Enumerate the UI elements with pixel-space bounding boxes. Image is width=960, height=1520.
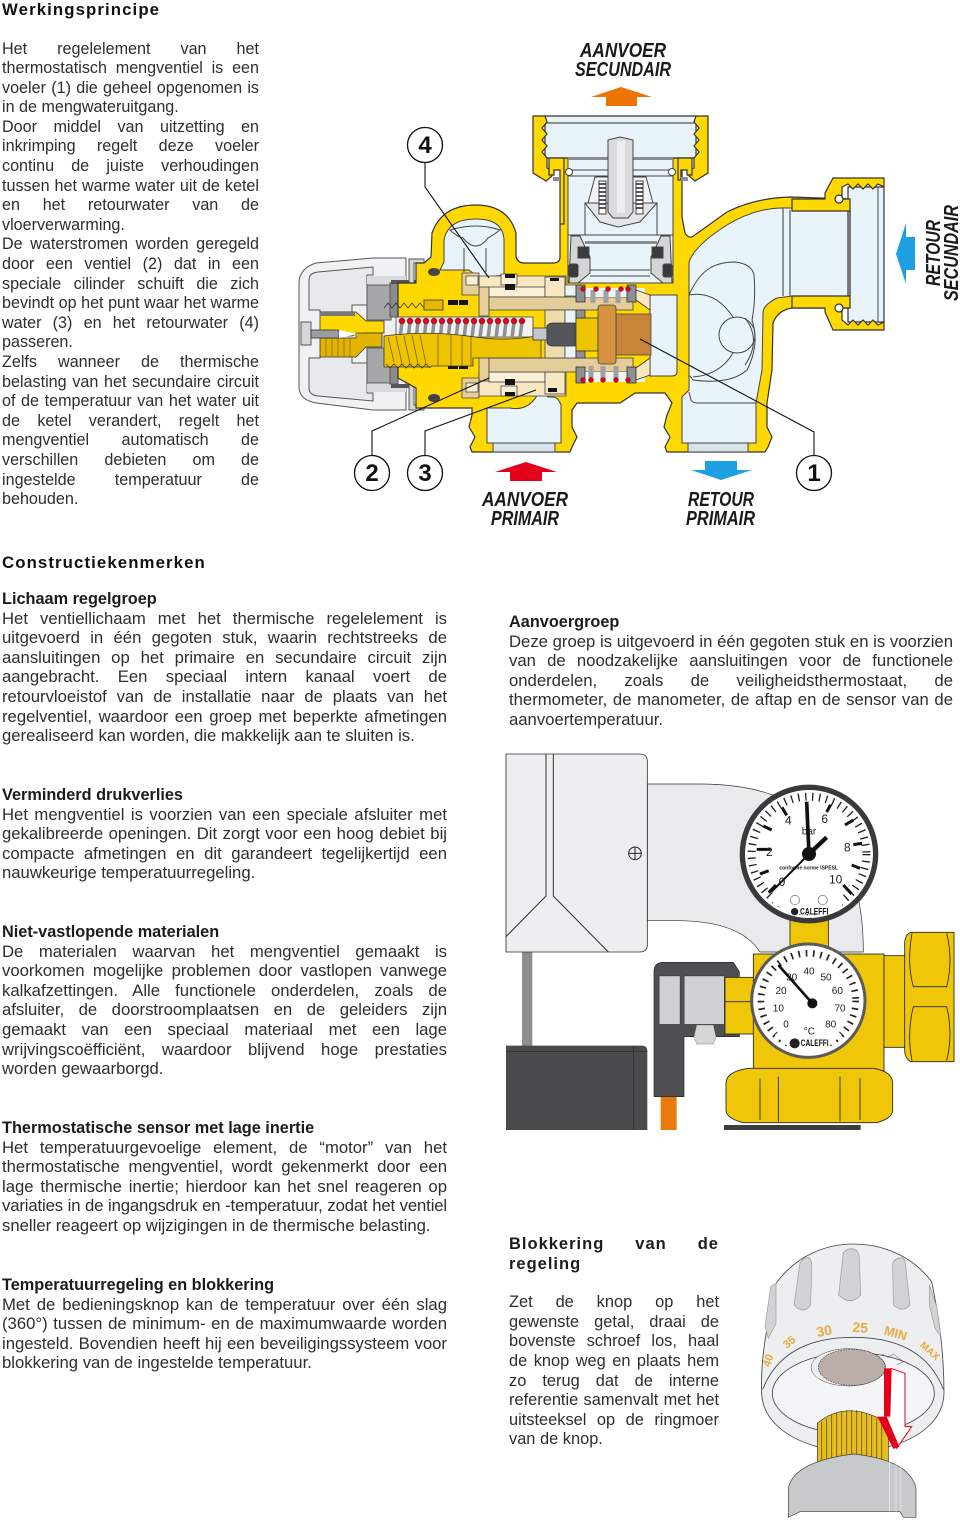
- text block: Lichaam regelgroep: aansluitingen op het primaire en secundaire circuit zijn: [2, 648, 447, 667]
- text block: working principle: passeren.: [2, 333, 73, 351]
- text block: Lichaam regelgroep: [2, 590, 447, 745]
- text block: Blokkering van de regeling: uitsteeksel op de ringmoer: [509, 1411, 719, 1429]
- seals: [428, 268, 559, 402]
- text block: working principle: continu de juiste verhoudingen: [2, 157, 259, 175]
- knob rim and opening: [763, 1337, 943, 1434]
- red arrow: [877, 1368, 912, 1449]
- copper sensor: [598, 305, 651, 364]
- temperature scale: 40: [761, 1353, 776, 1369]
- text block: Lichaam regelgroep: regelventiel, waardoor een groep met beperkte afmetingen: [2, 707, 447, 726]
- text block: Verminderd drukverlies: compacte afmetingen en dit garandeert tegelijkertijd een: [2, 844, 447, 863]
- water cavities: [440, 158, 850, 452]
- text block: Niet-vastlopende materialen: voorkomen mogelijke problemen door vastlopen vanwege: [2, 961, 447, 980]
- label: aanvoer primair: PRIMAIR: [491, 508, 559, 530]
- text block: Blokkering van de regeling: van de knop.: [509, 1430, 603, 1448]
- pressure gauge: bar: [802, 827, 817, 838]
- text block: Blokkering van de regeling: regeling: [509, 1255, 581, 1273]
- label: aanvoer secundair: AANVOER: [579, 40, 666, 62]
- text block: Temperatuurregeling en blokkering: Temperatuurregeling en blokkering: [2, 1276, 274, 1294]
- thermometer: 10: [773, 1003, 784, 1014]
- heading: Werkingsprincipe: Werkingsprincipe: [2, 0, 160, 19]
- text block: Lichaam regelgroep: Het ventiellichaam met het thermische regelelement is: [2, 609, 447, 628]
- thermometer: 40: [803, 966, 815, 977]
- text block: Lichaam regelgroep: Lichaam regelgroep: [2, 590, 157, 608]
- central spring: [396, 317, 533, 340]
- text block: Aanvoergroep: [509, 613, 953, 729]
- text block: Lichaam regelgroep: uitgevoerd in één gegoten stuk, waarin rechtstreeks de: [2, 628, 447, 647]
- text block: Temperatuurregeling en blokkering: blokkering van de ingestelde temperatuur.: [2, 1353, 312, 1372]
- text block: working principle: in de mengwateruitgang.: [2, 98, 179, 116]
- illustration: gauge assembly: [506, 754, 954, 1130]
- arrow: orange up: [591, 87, 652, 106]
- thermometer: 30: [786, 973, 798, 984]
- arrow: blue left: [896, 223, 915, 284]
- text block: Niet-vastlopende materialen: afsluiter, de doorstroomplaatsen en de geleiders zijn: [2, 1000, 447, 1019]
- illustration: temperature knob: [761, 1244, 944, 1518]
- text block: Aanvoergroep: thermometer, de manometer, de aftap en de sensor van de: [509, 690, 953, 709]
- thermometer: 20: [775, 986, 787, 997]
- arrow: red up: [495, 462, 557, 481]
- text block: working principle: behouden.: [2, 490, 78, 508]
- text block: Verminderd drukverlies: Verminderd drukverlies: [2, 786, 183, 804]
- text block: working principle: bevindt op het punt waar het warme: [2, 294, 259, 312]
- text block: Verminderd drukverlies: nauwkeurige temperatuurregeling.: [2, 863, 255, 882]
- text block: Aanvoergroep: onderdelen, zoals de veiligheidsthermostaat, de: [509, 671, 953, 690]
- text block: working principle: of de temperatuur van het water uit: [2, 392, 259, 410]
- text block: working principle: speciale cilinder schuift die zich: [2, 275, 259, 293]
- text block: working principle: door een ventiel (2) dat in een: [2, 255, 259, 273]
- thermometer: 70: [834, 1003, 846, 1014]
- text block: Thermostatische sensor: thermostatische mengventiel, wordt gekenmerkt door een: [2, 1157, 447, 1176]
- temperature scale: 25: [852, 1319, 869, 1336]
- text block: Temperatuurregeling en blokkering: Met de bedieningsknop kan de temperatuur over één slag: [2, 1295, 447, 1314]
- text block: Temperatuurregeling en blokkering: ingesteld. Bovendien heeft hij een beveiligingssysteem voor: [2, 1334, 447, 1353]
- heading: Constructiekenmerken: Constructiekenmerken: [2, 553, 206, 572]
- grey valve body: [788, 1454, 916, 1517]
- pressure gauge: 10: [829, 872, 843, 886]
- callout 4: 4: [418, 132, 432, 159]
- text block: Thermostatische sensor: [2, 1119, 447, 1235]
- sensor connector: [654, 962, 739, 1130]
- text block: Niet-vastlopende materialen: [2, 923, 447, 1078]
- text block: working principle: Het regelelement van het: [2, 40, 259, 58]
- temperature scale: 30: [815, 1321, 833, 1340]
- text block: Blokkering van de regeling: [509, 1235, 719, 1448]
- valve knob: [299, 258, 424, 410]
- text block: working principle: en het retourwater van de: [2, 196, 259, 214]
- text block: Lichaam regelgroep: gerealiseerd kan worden, die makkelijk aan te sluiten is.: [2, 726, 415, 745]
- text block: working principle: de ketel verandert, regelt het: [2, 412, 259, 430]
- text block: Temperatuurregeling en blokkering: [2, 1276, 447, 1372]
- callout 4: [408, 128, 442, 162]
- text block: Thermostatische sensor: Het temperatuurgevoelige element, de “motor” van het: [2, 1138, 447, 1157]
- text block: Thermostatische sensor: variaties in de ingangsdruk en -temperatuur, zodat het ventiel: [2, 1196, 447, 1215]
- text block: working principle: verschillen debieten om de: [2, 451, 259, 469]
- text block: Niet-vastlopende materialen: De materialen waarvan het mengventiel gemaakt is: [2, 942, 447, 961]
- text block: Blokkering van de regeling: zo terug dat de interne: [509, 1372, 719, 1390]
- thermometer: [752, 944, 865, 1057]
- text block: Temperatuurregeling en blokkering: (360°) tussen de minimum- en de maximumwaarde worden: [2, 1314, 447, 1333]
- text block: working principle: inkrimping regelt deze voeler: [2, 137, 259, 155]
- text block: working principle: voeler (1) die geheel opgenomen is: [2, 79, 259, 97]
- text block: Blokkering van de regeling: Blokkering van de: [509, 1235, 719, 1253]
- pressure gauge: 2: [766, 845, 773, 859]
- adjusting spindle and thread: [301, 300, 598, 368]
- knob shell: [761, 1244, 944, 1447]
- insulation shell: [506, 754, 647, 952]
- label: retour primair: [686, 489, 755, 530]
- top threaded nut: [533, 116, 708, 224]
- text block: Verminderd drukverlies: gekalibreerde openingen. Dit zorgt voor een hoog debiet bij: [2, 824, 447, 843]
- label: aanvoer primair: AANVOER: [481, 489, 568, 511]
- thermometer: 60: [832, 986, 843, 997]
- text block: Niet-vastlopende materialen: gemaakt van een speciaal materiaal met een lage: [2, 1020, 447, 1039]
- text block: working principle: tussen het warme water uit de ketel: [2, 177, 259, 195]
- label: retour primair: RETOUR: [688, 489, 754, 511]
- pressure gauge: CALEFFI: [800, 907, 828, 917]
- grey pipe elbow: [647, 784, 863, 952]
- text block: Lichaam regelgroep: aangebracht. Een speciaal intern kanaal voert de: [2, 667, 447, 686]
- thermometer: 0: [783, 1019, 789, 1030]
- text block: Aanvoergroep: Aanvoergroep: [509, 613, 619, 631]
- spring housings: [576, 285, 650, 383]
- callout 2: 2: [365, 460, 379, 487]
- text block: Verminderd drukverlies: [2, 786, 447, 882]
- text block: working principle: ingestelde temperatuur de: [2, 471, 259, 489]
- callout 1: [796, 456, 832, 490]
- temperature scale: MIN: [882, 1323, 909, 1344]
- text block: Niet-vastlopende materialen: worden gewaarborgd.: [2, 1059, 163, 1078]
- yellow group body: [724, 917, 954, 1130]
- elbow inner contours: [689, 262, 756, 403]
- pressure gauge: 6: [821, 812, 828, 826]
- thermometer: 80: [825, 1019, 837, 1030]
- valve body silhouette: [398, 158, 850, 452]
- text block: Blokkering van de regeling: bovenste schroef los, haal: [509, 1332, 719, 1350]
- pressure gauge: 4: [785, 814, 792, 828]
- callout 3: [408, 456, 442, 490]
- thermostatic chamber details: [566, 137, 676, 283]
- grey drop pipe: [522, 952, 532, 1046]
- text block: working principle: water (3) en het retourwater (4): [2, 314, 259, 332]
- right threaded fitting: [783, 178, 884, 330]
- text block: Aanvoergroep: aanvoertemperatuur.: [509, 710, 663, 729]
- text block: Verminderd drukverlies: Het mengventiel is voorzien van een speciale afsluiter met: [2, 805, 447, 824]
- label: aanvoer secundair: SECUNDAIR: [575, 59, 671, 81]
- text block: working principle: belasting van het secundaire circuit: [2, 373, 259, 391]
- temperature scale: 35: [781, 1334, 798, 1351]
- callout 2: [354, 456, 390, 490]
- label: retour primair: PRIMAIR: [686, 508, 755, 530]
- pressure gauge: 8: [844, 841, 851, 855]
- label: aanvoer primair: [481, 489, 568, 530]
- temperature scale: [761, 1319, 942, 1369]
- text block: working principle: De waterstromen worden geregeld: [2, 235, 259, 253]
- text block: working principle: vloerverwarming.: [2, 216, 125, 234]
- text block: working principle: Door middel van uitzetting en: [2, 118, 259, 136]
- text block: Blokkering van de regeling: gewenste getal, draai de: [509, 1313, 719, 1331]
- callout 3: 3: [418, 460, 432, 487]
- finger grooves: [765, 1249, 941, 1338]
- label: retour secundair: [923, 205, 960, 301]
- leader lines: [372, 162, 814, 457]
- thermometer: 50: [820, 973, 832, 984]
- diagram labels and numbered callouts: [354, 40, 960, 530]
- dark box: [506, 1046, 647, 1130]
- text block: Niet-vastlopende materialen: wrijvingscoëfficiënt, waardoor blijvend hoge prestaties: [2, 1040, 447, 1059]
- text block: Blokkering van de regeling: referentie samenvalt met het: [509, 1391, 719, 1409]
- thermometer: CALEFFI: [801, 1038, 829, 1048]
- text block: Aanvoergroep: Deze groep is uitgevoerd in één gegoten stuk en is voorzien: [509, 632, 953, 651]
- text block: Thermostatische sensor: lage thermische inertie; hierdoor kan het snel reageren op: [2, 1177, 447, 1196]
- label: aanvoer secundair: [575, 40, 671, 81]
- text block: working principle: thermostatisch mengventiel is een: [2, 59, 259, 77]
- text block: working principle: mengventiel automatisch de: [2, 431, 259, 449]
- temperature scale: MAX: [917, 1340, 942, 1363]
- pressure gauge: conforme norme ISPESL: [779, 866, 838, 872]
- arrow: blue down: [691, 461, 752, 480]
- cream cartridge: [462, 273, 645, 398]
- text block: working principle: [2, 40, 259, 508]
- text block: Aanvoergroep: van de noodzakelijke aansluitingen voor de functionele: [509, 651, 953, 670]
- pressure gauge: 0: [779, 875, 786, 889]
- text block: Blokkering van de regeling: Zet de knop op het: [509, 1293, 719, 1311]
- callout 1: 1: [807, 460, 821, 487]
- text block: Niet-vastlopende materialen: kalkafzettingen. Alle functionele onderdelen, zoals de: [2, 981, 447, 1000]
- text block: working principle: Zelfs wanneer de thermische: [2, 353, 259, 371]
- spring red dots: [399, 286, 630, 382]
- knurled ring: [817, 1410, 888, 1463]
- text block: Thermostatische sensor: sneller reageert op wijzigingen in de thermische belasting.: [2, 1216, 431, 1235]
- text block: Thermostatische sensor: Thermostatische sensor met lage inertie: [2, 1119, 314, 1137]
- pressure gauge: [742, 787, 876, 921]
- arch interior dome: [450, 226, 500, 272]
- diagram: valve cross-section: [298, 87, 915, 481]
- label: retour secundair: RETOUR: [923, 220, 945, 286]
- thermometer: °C: [804, 1027, 815, 1038]
- text block: Lichaam regelgroep: retourvloeistof van de installatie naar de plaats van het: [2, 687, 447, 706]
- text block: Niet-vastlopende materialen: Niet-vastlopende materialen: [2, 923, 219, 941]
- text block: Blokkering van de regeling: de knop weg en plaats hem: [509, 1352, 719, 1370]
